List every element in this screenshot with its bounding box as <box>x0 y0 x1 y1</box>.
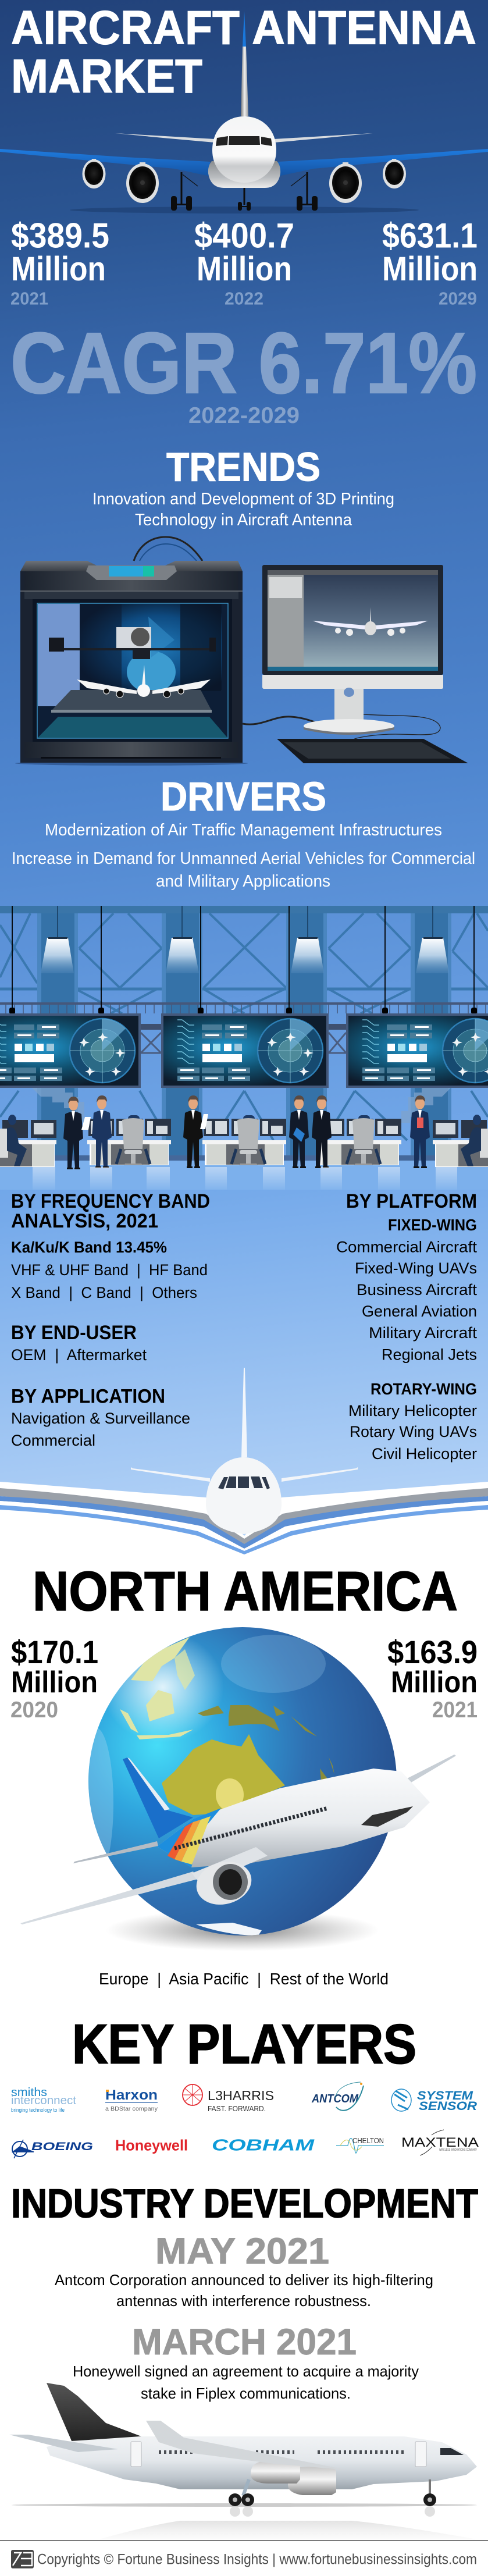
development: May 2021: antennas with interference robustness. <box>116 2292 371 2310</box>
hanging cables <box>9 906 477 1014</box>
logo: System Sensor <box>391 2089 478 2113</box>
staircases <box>32 1088 451 1123</box>
stat: 2022 market size: Million <box>197 250 292 288</box>
stat: North America 2021: $163.9 <box>387 1634 478 1670</box>
illustration: air traffic control room <box>0 906 488 1190</box>
logo: Boeing: BOEING <box>31 2141 93 2153</box>
development: May 2021 <box>55 2231 433 2310</box>
stat: 2029 market size: $631.1 <box>382 216 478 255</box>
logo: Maxtena: MAXTENA <box>401 2135 479 2150</box>
drivers heading: DRIVERS <box>161 774 326 819</box>
other regions: Europe | Asia Pacific | Rest of the World <box>99 1970 389 1988</box>
trends heading: TRENDS <box>166 444 320 490</box>
ceiling lamps <box>41 906 449 973</box>
logo: Harxon <box>105 2087 158 2112</box>
segment: by platform: Regional Jets <box>382 1346 477 1364</box>
logo: Harxon: a BDStar company <box>105 2106 158 2112</box>
roof beam <box>0 906 488 913</box>
segment: by end-user: BY END-USER <box>11 1322 137 1344</box>
development: March 2021: Honeywell signed an agreement to acquire a majority <box>73 2362 419 2380</box>
logo: Maxtena <box>401 2130 479 2155</box>
stat: 2022 market size: 2022 <box>225 289 263 308</box>
stat: 2029 market size: 2029 <box>439 289 477 308</box>
columns <box>37 913 451 1155</box>
illustration: globe with airliner <box>20 1627 456 1951</box>
stat: North America 2021: 2021 <box>432 1698 478 1723</box>
structural diagonals <box>0 913 488 1140</box>
segment: by frequency band: Ka/Ku/K Band 13.45% <box>11 1239 167 1256</box>
standing staff <box>63 1095 430 1169</box>
segment: by platform: Civil Helicopter <box>372 1445 477 1463</box>
connecting truss between screens <box>141 1024 346 1053</box>
radar display screens <box>0 1013 488 1088</box>
illustration: monitor and keyboard <box>243 565 468 763</box>
logo: Smiths Interconnect: smiths <box>11 2086 47 2099</box>
logo: Smiths Interconnect: interconnect <box>11 2094 76 2107</box>
segment: by platform: ROTARY-WING <box>371 1380 477 1398</box>
title: ANTENNA <box>252 1 476 55</box>
stat: North America 2020 <box>10 1634 98 1723</box>
segment: by platform: Rotary Wing UAVs <box>350 1423 477 1440</box>
logo: Honeywell: Honeywell <box>115 2136 188 2154</box>
stat: 2029 market size <box>382 216 478 308</box>
stat: North America 2020: Million <box>11 1666 98 1699</box>
stat: 2021 market size: Million <box>11 250 106 288</box>
footer: logo <box>11 2550 34 2568</box>
trends text: Innovation and Development of 3D Printing <box>92 490 394 508</box>
segment: by application: BY APPLICATION <box>11 1386 165 1408</box>
heading: key players: KEY PLAYERS <box>72 2013 416 2076</box>
illustration: 3D printer printing an aircraft <box>15 537 248 766</box>
segment: by application: Commercial <box>11 1432 95 1449</box>
walkway railing <box>0 1002 488 1013</box>
page background gradient <box>0 0 488 1559</box>
development: March 2021: stake in Fiplex communications. <box>141 2385 351 2402</box>
illustration: white aircraft with wings dividing the section <box>0 1368 488 1559</box>
title: MARKET <box>11 50 202 103</box>
logo: L3Harris <box>183 2084 274 2113</box>
trends text: Technology in Aircraft Antenna <box>135 511 352 529</box>
segment: by frequency band <box>11 1190 210 1301</box>
segment: by platform: Business Aircraft <box>357 1281 478 1298</box>
drivers text <box>12 821 475 891</box>
stat: North America 2020: $170.1 <box>11 1634 98 1670</box>
logo: Smiths Interconnect: bringing technology to life <box>11 2107 65 2113</box>
segment: by frequency band: ANALYSIS, 2021 <box>11 1210 158 1232</box>
stat: North America 2021 <box>387 1634 478 1723</box>
baseboard and floor <box>0 1155 488 1190</box>
segment: by application <box>11 1386 190 1449</box>
segment: by platform: General Aviation <box>362 1303 477 1320</box>
illustration: side view airliner <box>9 2383 477 2539</box>
drivers text: and Military Applications <box>156 872 330 891</box>
development: March 2021: MARCH 2021 <box>132 2322 357 2362</box>
logo: L3Harris: L3HARRIS <box>208 2088 274 2103</box>
floor reflections <box>33 1167 457 1190</box>
stat: North America 2020: 2020 <box>10 1698 58 1723</box>
segment: by end-user <box>11 1322 147 1364</box>
segment: by frequency band: X Band | C Band | Others <box>11 1284 197 1301</box>
segment: by platform: Commercial Aircraft <box>336 1238 478 1255</box>
drivers text: Modernization of Air Traffic Management Infrastructures <box>45 821 442 839</box>
title: AIRCRAFT <box>11 1 240 55</box>
segment: by platform: BY PLATFORM <box>346 1190 477 1212</box>
stat: 2021 market size: $389.5 <box>11 216 109 255</box>
title <box>11 1 476 103</box>
logo: Chelton: CHELTON <box>352 2136 384 2145</box>
footer rule <box>0 2540 488 2541</box>
logo: Harxon: Harxon <box>105 2087 158 2103</box>
stat: North America 2021: Million <box>391 1666 478 1699</box>
logo: L3Harris: FAST. FORWARD. <box>208 2104 266 2113</box>
logo: Chelton <box>336 2136 384 2153</box>
segment: by frequency band: VHF & UHF Band | HF Band <box>11 1261 208 1279</box>
development: March 2021 <box>73 2322 419 2402</box>
stat: 2022 market size <box>194 216 294 308</box>
segment: by end-user: OEM | Aftermarket <box>11 1346 147 1364</box>
logo: Antcom: ANTCOM <box>311 2093 359 2105</box>
stat: 2029 market size: Million <box>382 250 478 288</box>
segment: by frequency band: BY FREQUENCY BAND <box>11 1190 210 1212</box>
trends text <box>92 490 394 529</box>
segment: by platform: Military Aircraft <box>369 1324 478 1342</box>
stat: 2021 market size: 2021 <box>10 289 48 308</box>
illustration: airliner front view <box>0 11 488 214</box>
segment: by platform: Military Helicopter <box>348 1402 477 1419</box>
logo: Smiths Interconnect <box>11 2086 76 2113</box>
stat: 2022 market size: $400.7 <box>194 216 294 255</box>
stat: 2021 market size <box>10 216 109 308</box>
logo: Antcom <box>311 2082 364 2111</box>
logo: Boeing <box>12 2140 93 2158</box>
control desks with operators <box>0 1115 488 1167</box>
development: May 2021: Antcom Corporation announced to deliver its high-filtering <box>55 2271 433 2289</box>
segment: by platform: Fixed-Wing UAVs <box>355 1259 477 1277</box>
development: May 2021: MAY 2021 <box>155 2231 329 2272</box>
segment: by platform <box>336 1190 478 1463</box>
CAGR callout: 2022-2029 <box>188 403 300 428</box>
segment: by application: Navigation & Surveillance <box>11 1410 190 1427</box>
segment: by platform: FIXED-WING <box>388 1216 477 1234</box>
logo: Cobham: COBHAM <box>212 2136 315 2154</box>
logo: System Sensor: SYSTEM <box>417 2089 473 2102</box>
logo: System Sensor: SENSOR <box>419 2100 478 2113</box>
